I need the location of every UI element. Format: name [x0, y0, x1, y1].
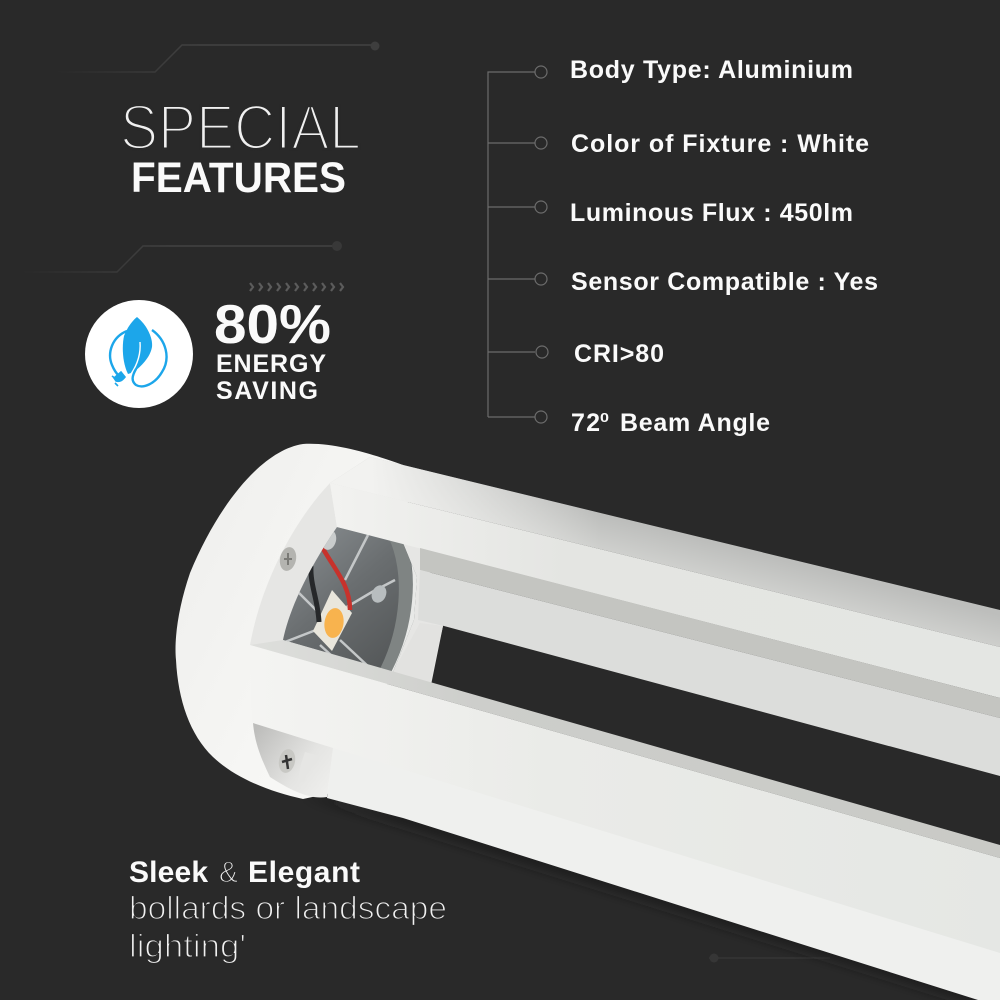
circuit line: bottom right	[709, 954, 830, 962]
caption: sleek and elegant: bollards or landscape	[129, 890, 447, 926]
lamp end cap	[176, 444, 420, 799]
stat: 80% energy saving: 80%	[214, 293, 331, 355]
right bracket behind rail	[393, 623, 443, 682]
tube strip highlight	[330, 457, 600, 549]
inner shaded band	[420, 548, 1000, 718]
caption: sleek and elegant: &	[219, 856, 238, 889]
screw top	[278, 546, 298, 572]
heading: SPECIAL FEATURES: FEATURES	[131, 154, 346, 202]
feature: sensor compatible: Sensor Compatible : Yes	[571, 268, 878, 296]
bracket tab	[298, 752, 320, 782]
product photo: white bollard lamp	[176, 444, 1000, 1000]
tube top strip	[330, 457, 1000, 647]
cap front plate	[250, 483, 443, 690]
heading: SPECIAL FEATURES	[120, 93, 361, 202]
plug	[112, 372, 125, 386]
stat: 80% energy saving: SAVING	[216, 377, 318, 405]
LED board	[313, 590, 352, 651]
caption: sleek and elegant: Elegant	[248, 856, 360, 889]
chevron row	[250, 283, 343, 291]
black wire	[311, 566, 319, 622]
top rail	[330, 483, 1000, 698]
spokes	[285, 535, 395, 668]
LED chip	[324, 608, 344, 638]
back ring	[382, 535, 406, 680]
heading: SPECIAL FEATURES: SPECIAL	[120, 93, 361, 163]
leaf vein	[131, 342, 140, 374]
leaf	[123, 317, 152, 374]
metal bracket	[253, 723, 333, 798]
circuit line: middle left	[20, 241, 342, 272]
caption: sleek and elegant: Sleek	[129, 856, 208, 889]
lower rail face	[250, 645, 1000, 958]
feature: body type: Body Type: Aluminium	[570, 56, 853, 84]
power cord	[110, 330, 167, 386]
red wire	[322, 547, 350, 610]
feature: CRI: CRI>80	[574, 340, 664, 368]
icon: leaf with plug in white circle	[85, 300, 193, 408]
middle rail	[418, 570, 1000, 776]
feature connector tree	[488, 66, 548, 423]
circuit line: top left	[55, 42, 380, 72]
caption: sleek and elegant: lighting'	[129, 928, 246, 964]
feature: beam angle: 0	[600, 410, 609, 425]
feature: color of fixture: Color of Fixture : White	[571, 130, 869, 158]
feature: beam angle: 72	[571, 409, 600, 437]
lower rail underside	[327, 748, 1000, 1000]
feature: luminous flux: Luminous Flux : 450lm	[570, 199, 853, 227]
feature: beam angle: Beam Angle	[620, 409, 770, 437]
stat: 80% energy saving	[214, 293, 331, 405]
stat: 80% energy saving: ENERGY	[216, 350, 326, 378]
lower rail top band	[250, 640, 1000, 858]
top wire terminal	[324, 532, 336, 550]
lamp shadow	[300, 794, 1000, 1000]
lamp window with LED	[283, 527, 417, 672]
caption: sleek and elegant	[129, 856, 447, 964]
screw bottom	[277, 748, 297, 774]
